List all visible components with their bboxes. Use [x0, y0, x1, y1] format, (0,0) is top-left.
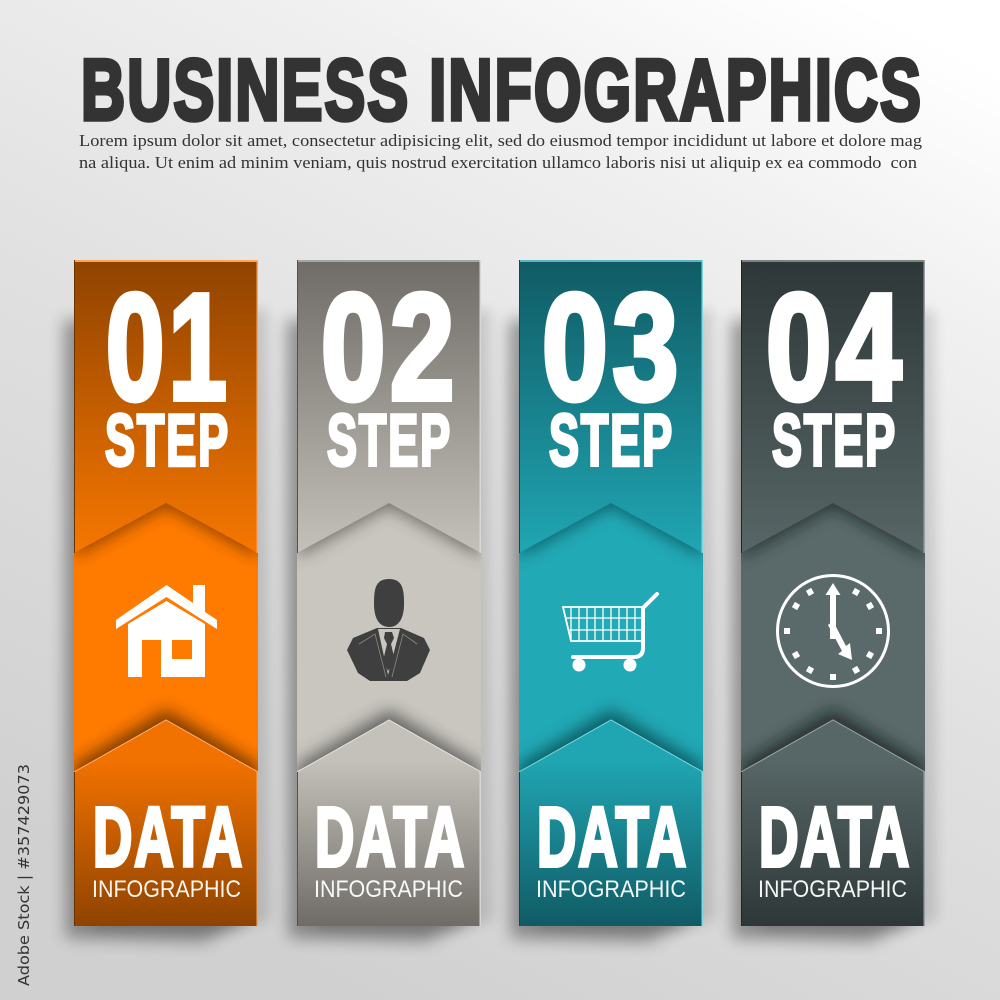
panel: step 01	[64, 260, 270, 942]
label INFOGRAPHIC: INFOGRAPHIC	[92, 876, 241, 903]
lower section	[741, 720, 925, 926]
intro text	[79, 131, 923, 172]
number 03: 03	[542, 262, 683, 431]
label DATA: DATA	[315, 790, 466, 884]
label STEP: STEP	[549, 400, 674, 481]
panel shadow	[287, 310, 493, 942]
number 01: 01	[106, 262, 231, 431]
panel: step 03	[509, 260, 715, 942]
panel: step 04	[731, 260, 937, 942]
middle band	[74, 503, 258, 773]
upper section	[74, 260, 258, 553]
icon: house	[116, 585, 217, 677]
number 02: 02	[321, 262, 459, 431]
middle band	[519, 503, 703, 773]
label DATA: DATA	[93, 790, 244, 884]
lower section	[74, 720, 258, 926]
upper section	[519, 260, 703, 553]
label INFOGRAPHIC: INFOGRAPHIC	[314, 876, 463, 903]
icon: clock	[778, 576, 888, 686]
lower section	[297, 720, 481, 926]
label STEP: STEP	[772, 400, 897, 481]
icon: businessman	[347, 579, 430, 681]
panel shadow	[509, 310, 715, 942]
icon: shopping cart	[563, 594, 657, 672]
label INFOGRAPHIC: INFOGRAPHIC	[536, 876, 686, 903]
stock number: Adobe Stock | #357429073	[15, 764, 33, 986]
upper section	[297, 260, 481, 553]
label STEP: STEP	[327, 400, 452, 481]
intro text: Lorem ipsum dolor sit amet, consectetur adipisicing elit, sed do eiusmod tempor incididunt ut labore et dolore mag	[79, 131, 923, 150]
middle band	[297, 503, 481, 773]
panel shadow	[64, 310, 270, 942]
lower section	[519, 720, 703, 926]
label INFOGRAPHIC: INFOGRAPHIC	[758, 876, 907, 903]
upper section	[741, 260, 925, 553]
panel shadow	[731, 310, 937, 942]
label DATA: DATA	[759, 790, 911, 884]
label DATA: DATA	[537, 790, 688, 884]
number 04: 04	[766, 262, 906, 431]
middle band	[741, 503, 925, 773]
intro text: na aliqua. Ut enim ad minim veniam, quis nostrud exercitation ullamco laboris nisi ut aliquip ex ea commodo con	[79, 153, 918, 172]
panel: step 02	[287, 260, 493, 942]
label STEP: STEP	[105, 400, 230, 481]
